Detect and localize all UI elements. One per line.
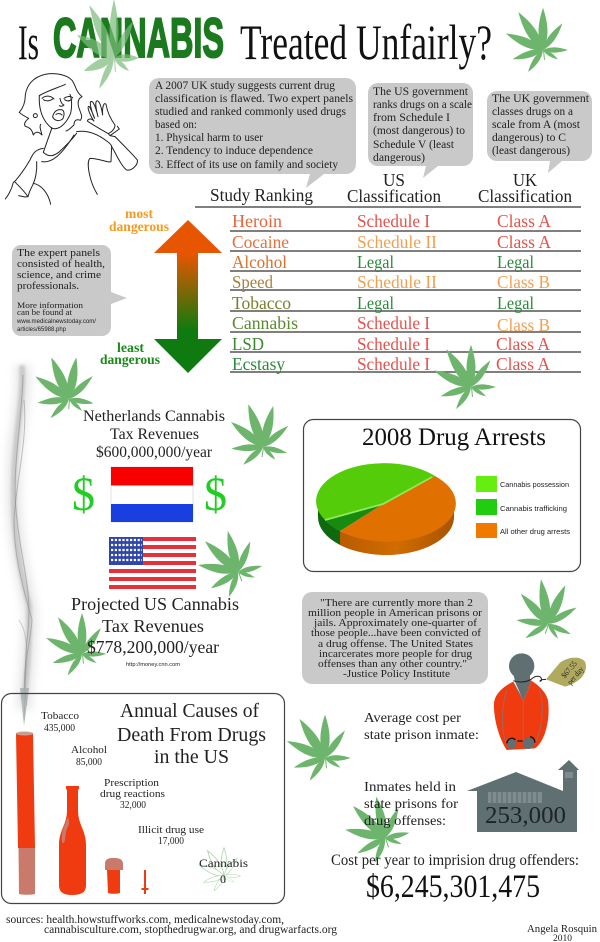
text: projected US revenue: http://money.cnn.com (126, 662, 180, 668)
icon: pill bottle (105, 858, 123, 894)
table rows: Schedule I (357, 334, 430, 354)
text: inmates held: state prisons for (364, 797, 458, 812)
text: average cost: Average cost per (364, 711, 461, 726)
table: drug classification (195, 170, 581, 374)
text: Netherlands revenue: $600,000,000/year (96, 444, 213, 461)
table rows: Legal (497, 252, 534, 272)
icon: Netherlands flag (111, 467, 193, 522)
table rows: Schedule I (357, 313, 430, 333)
text: average cost (364, 711, 479, 743)
icon: leaf beside US flag (190, 525, 268, 604)
callout: UK study: studied and ranked commonly used drugs (155, 106, 347, 118)
table column headings: UK (513, 170, 537, 190)
table rows: Schedule I (357, 211, 430, 231)
title: CANNABIS (53, 6, 224, 69)
text: author credit (527, 923, 597, 942)
text: Netherlands revenue (83, 408, 225, 461)
legend: Cannabis possession (500, 480, 569, 489)
callout: UK government: scale from A (most (492, 119, 581, 131)
label: prescription drug reactions: Prescription (104, 777, 160, 789)
icon: bottle (59, 786, 86, 895)
legend: All other drug arrests (500, 527, 570, 536)
label: most dangerous: dangerous (109, 219, 169, 234)
table rows: Legal (497, 293, 534, 313)
callout: UK government: dangerous) to C (492, 132, 566, 144)
table rows: Ecstasy (232, 354, 285, 374)
icon: right dollar sign: $ (204, 468, 227, 521)
table rows: Class B (497, 272, 550, 292)
callout: UK study: 2. Tendency to induce dependence (155, 145, 313, 157)
table rows (232, 211, 551, 374)
text: Netherlands revenue: Netherlands Cannabis (83, 408, 225, 425)
label: most dangerous (109, 206, 169, 234)
table rows: LSD (232, 334, 264, 354)
icon: rising smoke (14, 365, 32, 726)
text: inmates held (364, 780, 458, 829)
text: projected US revenue: Projected US Cannabis (71, 594, 239, 614)
callout: expert panels: www.medicalnewstoday.com/ (16, 319, 96, 325)
callout: Justice Policy Institute quote: -Justice Policy Institute (343, 668, 450, 680)
label: tobacco (41, 710, 80, 734)
callout: expert panels: professionals. (17, 280, 79, 292)
callout: US government: (most dangerous) to (373, 125, 465, 137)
label: alcohol: 85,000 (76, 756, 102, 768)
icon: leaf beside prison cost (285, 714, 351, 782)
callout: UK government: (least dangerous) (492, 145, 570, 157)
callout: UK government: classes drugs on a (492, 106, 573, 118)
table rows: Cocaine (232, 232, 289, 252)
callout: US government: from Schedule I (373, 112, 450, 124)
label: illicit drug use (138, 824, 204, 847)
text: inmates held: drug offenses: (364, 814, 446, 829)
callout: expert panels (12, 245, 127, 336)
callout: expert panels: The expert panels (17, 247, 100, 259)
title (18, 6, 492, 70)
table column headings (210, 170, 572, 206)
title: Treated Unfairly? (240, 14, 492, 70)
icon: prison inmate with price tag (494, 653, 586, 750)
table rows: Class A (496, 334, 550, 354)
icon: prison inmate with price tag: per day (565, 665, 586, 686)
text: average cost: state prison inmate: (364, 728, 479, 743)
callout: expert panels: consisted of health, (17, 258, 105, 270)
heading: pie chart title: 2008 Drug Arrests (362, 424, 546, 451)
table rows: Speed (232, 272, 273, 292)
table rows: Class A (497, 211, 551, 231)
icon: leaf under US revenue (44, 613, 106, 677)
pie chart (316, 463, 456, 555)
text: Netherlands revenue: Tax Revenues (110, 426, 199, 443)
table rows: Heroin (232, 211, 282, 231)
callout: Justice Policy Institute quote: offenses than any other country." (318, 658, 467, 670)
title: Is (18, 14, 39, 70)
table rows: Alcohol (232, 252, 287, 272)
icon: leaf under inmates text (338, 792, 414, 869)
label: tobacco: 435,000 (44, 722, 75, 734)
callout: Justice Policy Institute quote: incarcerates more people for drug (319, 648, 473, 660)
callout: Justice Policy Institute quote: a drug offense. The United States (318, 638, 473, 650)
callout: US government: dangerous) (373, 152, 425, 164)
text: projected US revenue: $778,200,000/year (87, 637, 219, 657)
table rows: Class A (497, 232, 551, 252)
arrow: danger scale (154, 220, 222, 373)
panel: 2008 drug arrests (304, 420, 580, 572)
table rows: Cannabis (232, 313, 298, 333)
label: alcohol (71, 744, 107, 768)
icon: US flag (109, 537, 196, 589)
callout: UK study: based on: (155, 119, 197, 131)
legend (476, 476, 570, 538)
callout: UK study: A 2007 UK study suggests current drug (155, 80, 335, 92)
label: prescription drug reactions (100, 777, 165, 811)
table rows: Class A (496, 354, 550, 374)
label: illicit drug use: 17,000 (158, 835, 184, 847)
label: most dangerous: most (125, 206, 154, 221)
callout: UK government: The UK government (492, 93, 590, 105)
text: sources: cannabisculture.com, stopthedrugwar.org, and drugwarfacts.org (44, 924, 337, 936)
table rows: Schedule II (357, 272, 437, 292)
callout: UK government (487, 91, 592, 173)
text: inmates held: Inmates held in (364, 780, 456, 795)
icon: leaf over table (432, 345, 496, 411)
text: projected US revenue (71, 594, 239, 668)
callout: Justice Policy Institute quote: "There are currently more than 2 (320, 597, 473, 609)
callout: US government (368, 83, 473, 178)
heading: causes of death (117, 700, 266, 768)
callout: UK study: 1. Physical harm to user (155, 132, 263, 144)
callout: UK study (149, 78, 356, 188)
label: illicit drug use: Illicit drug use (138, 824, 204, 836)
table column headings: Classification (478, 186, 572, 206)
text: projected US revenue: Tax Revenues (102, 616, 204, 636)
callout: expert panels: science, and crime (17, 269, 101, 281)
label: cannabis zero: 0 (220, 872, 226, 886)
callout: US government: The US government (373, 86, 469, 98)
table rows: Schedule I (357, 354, 430, 374)
label: least dangerous: dangerous (100, 352, 160, 367)
illustration: shouting woman (5, 74, 137, 204)
text: cost per year label: Cost per year to imprision drug offenders: (331, 852, 579, 869)
callout: UK study: 3. Effect of its use on family and society (155, 159, 338, 171)
label: cannabis zero: Cannabis (199, 856, 248, 870)
icon: leaf behind title (75, 0, 139, 91)
table rows: Class B (497, 315, 550, 335)
table column headings: Classification (347, 186, 441, 206)
label: least dangerous: least (117, 340, 145, 355)
text: sources (6, 914, 337, 936)
table column headings: US (383, 170, 405, 190)
table rows: Legal (357, 252, 394, 272)
table column headings: Study Ranking (210, 185, 313, 205)
icon: leaf upper left (27, 351, 101, 427)
callout: US government: Schedule V (least (373, 139, 455, 151)
text: author credit: Angela Rosquin (527, 923, 597, 935)
icon: outlined leaf (198, 848, 241, 892)
callout: expert panels: More information (17, 300, 84, 310)
label: alcohol: Alcohol (71, 744, 107, 756)
callout: expert panels: can be found at (17, 307, 73, 317)
heading: causes of death: Annual Causes of (120, 700, 259, 722)
icon: cigarette (16, 732, 35, 895)
callout: UK study: classification is flawed. Two expert panels (155, 93, 354, 105)
heading: causes of death: Death From Drugs (117, 724, 266, 746)
callout: Justice Policy Institute quote: those people...have been convicted of (311, 627, 481, 639)
callout: Justice Policy Institute quote: million people in American prisons or (308, 607, 482, 619)
icon: leaf beside Netherlands (220, 397, 297, 476)
heading: causes of death: in the US (154, 746, 229, 768)
label: prescription drug reactions: 32,000 (120, 799, 146, 811)
legend: Cannabis trafficking (500, 504, 567, 513)
table rows: Legal (357, 293, 394, 313)
callout: Justice Policy Institute quote: jails. Approximately one-quarter of (313, 617, 477, 629)
callout: Justice Policy Institute quote (302, 592, 488, 684)
callout: expert panels: articles/65988.php (17, 327, 67, 333)
label: tobacco: Tobacco (41, 710, 80, 722)
icon: left dollar sign: $ (72, 468, 95, 521)
icon: leaf beside quote (503, 570, 588, 656)
table rows: Tobacco (232, 293, 291, 313)
label: prescription drug reactions: drug reactions (100, 788, 165, 800)
icon: prison inmate with price tag: $67.55 (560, 659, 579, 680)
icon: prison building: 253,000 (485, 803, 566, 829)
label: least dangerous (100, 340, 160, 367)
panel: annual causes of death (2, 694, 284, 904)
label: cannabis zero (199, 856, 248, 886)
text: sources: sources: health.howstuffworks.com, medicalnewstoday.com, (6, 914, 284, 926)
table rows: Schedule II (357, 232, 437, 252)
icon: prison building (467, 760, 579, 832)
icon: syringe (142, 870, 148, 894)
big number: total cost: $6,245,301,475 (366, 869, 540, 905)
icon: leaf top right (504, 8, 568, 74)
callout: US government: ranks drugs on a scale (373, 99, 472, 111)
